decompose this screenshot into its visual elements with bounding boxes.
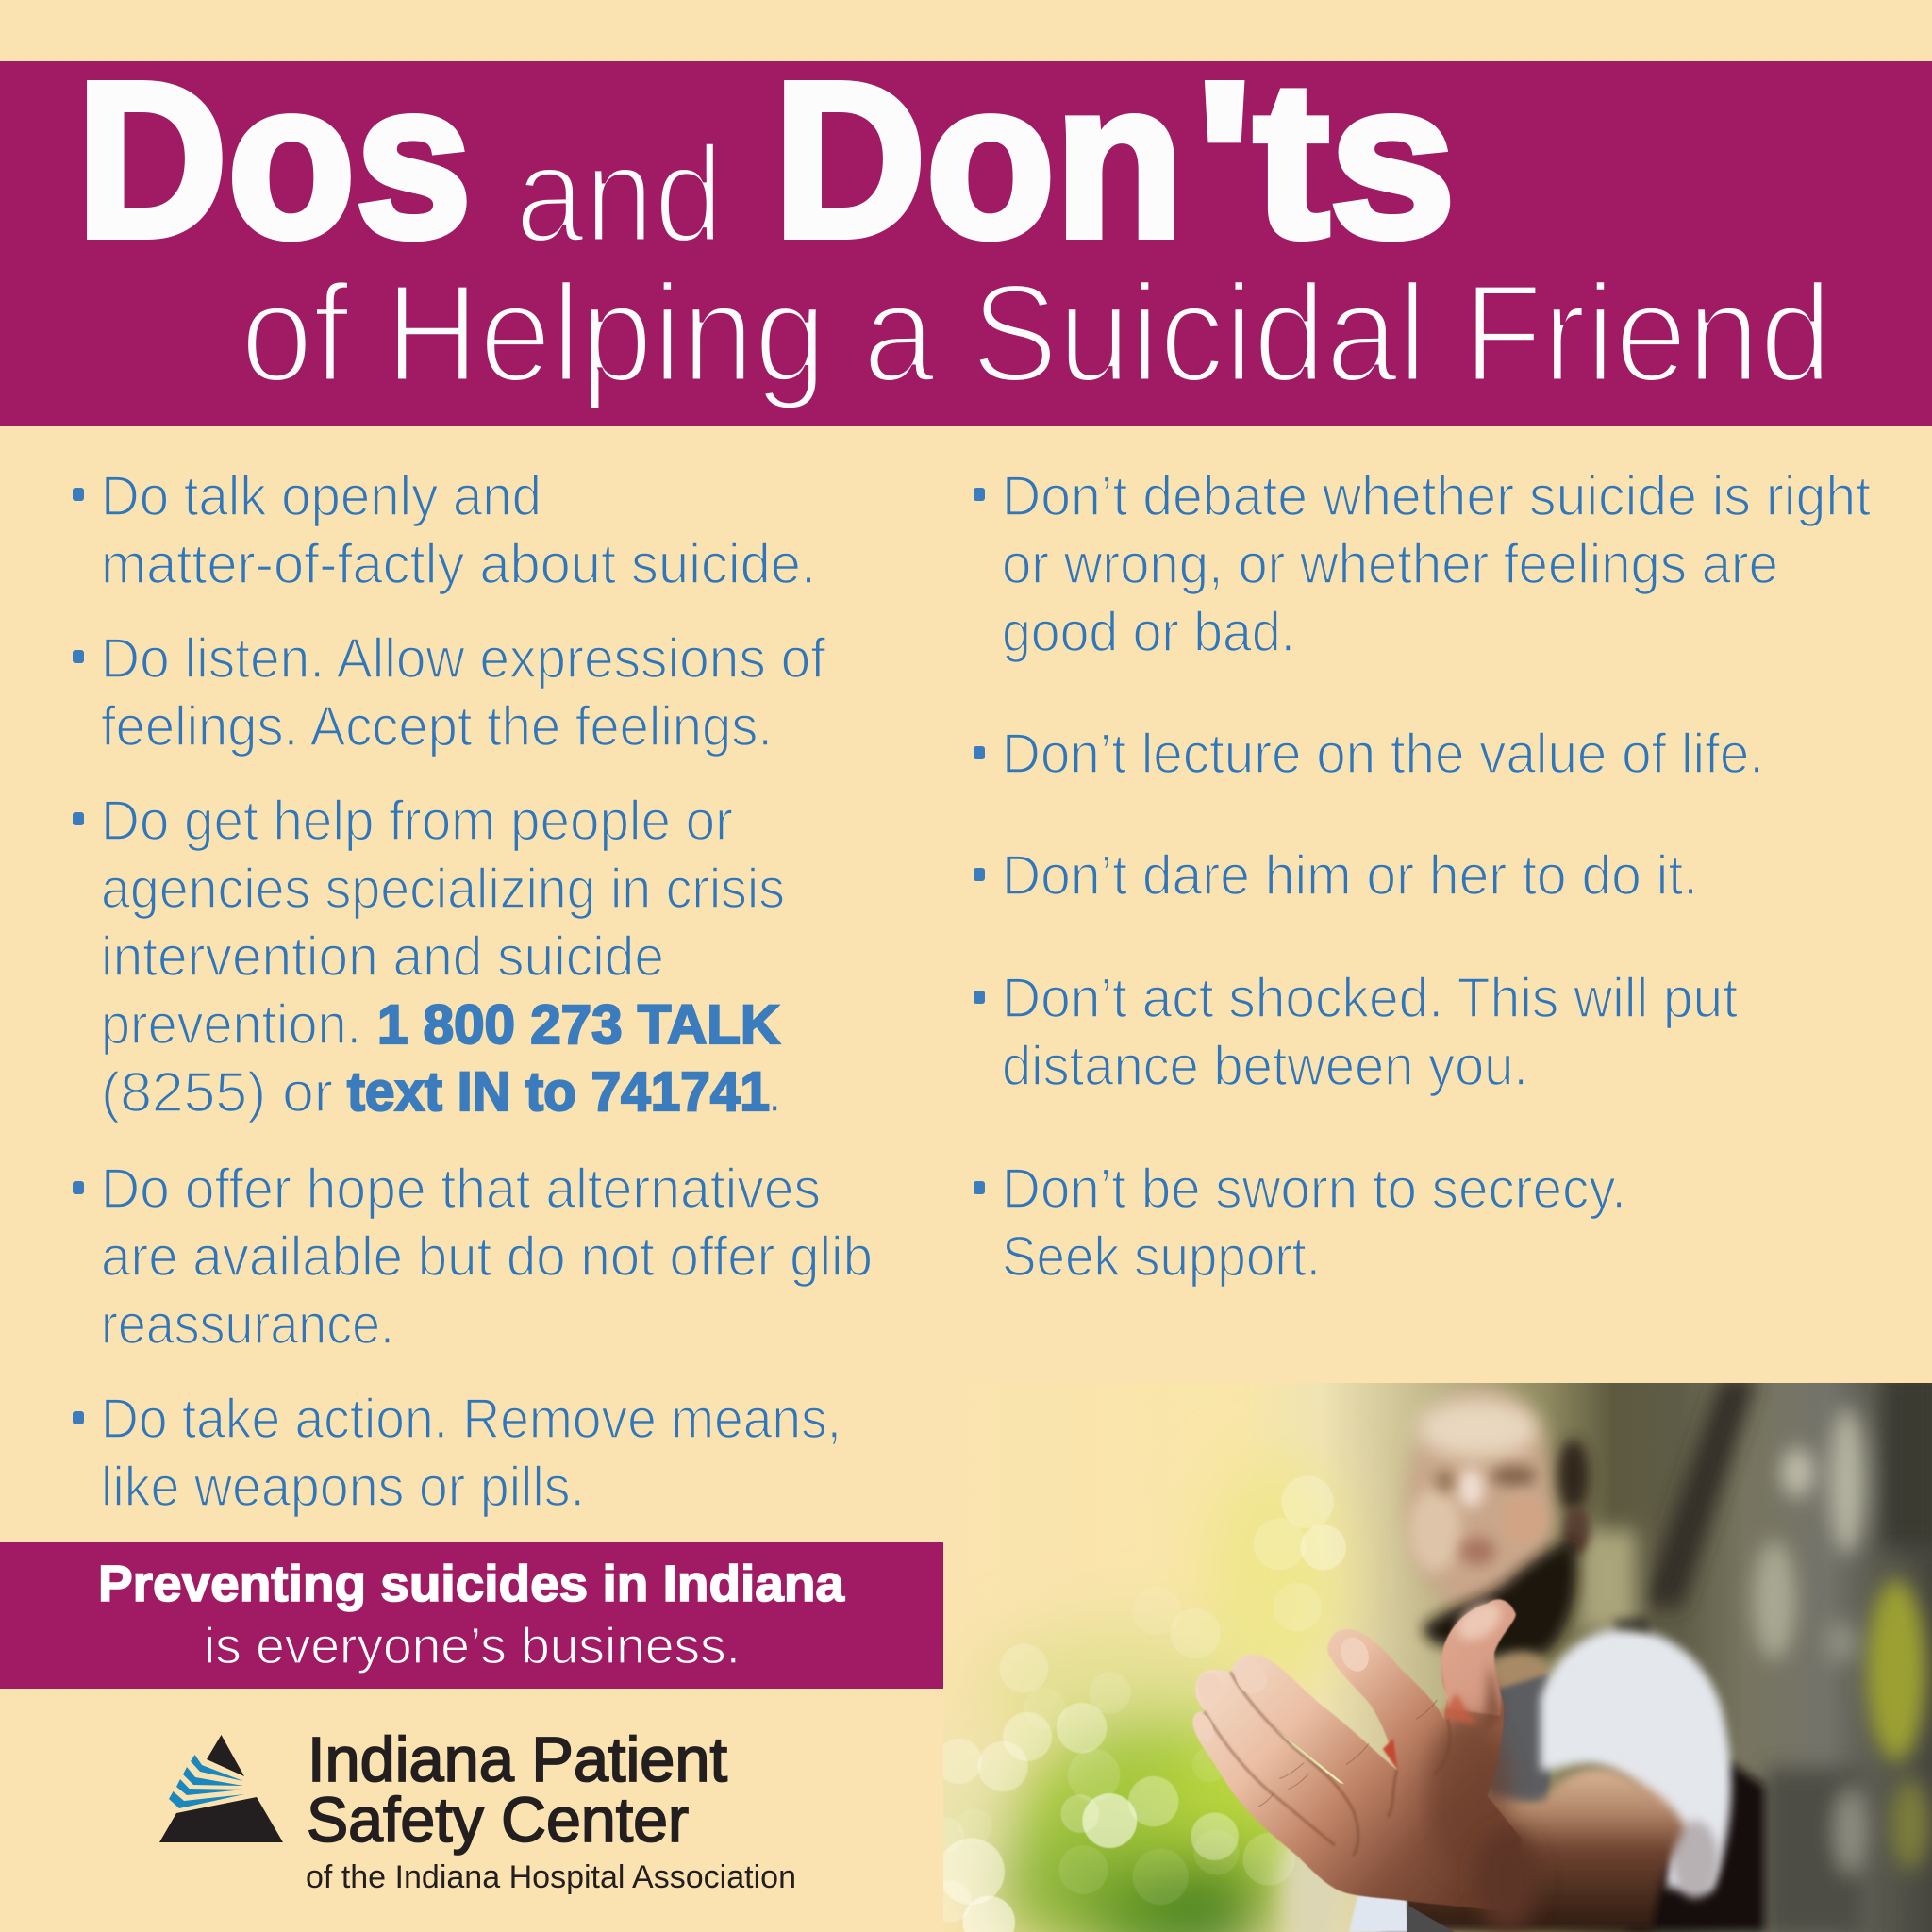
forearm: [1382, 1768, 1686, 1932]
logo: Indiana Patient Safety Center: [159, 1724, 796, 1895]
do item 2: Do listen. Allow expressions of: [101, 627, 826, 690]
icon: pyramid: [159, 1735, 283, 1842]
left column: dos: [73, 465, 873, 1518]
title: Dos: Dos: [76, 36, 472, 283]
don't item 2: Don’t lecture on the value of life.: [1002, 723, 1764, 785]
finger shading: [1205, 1672, 1450, 1856]
do item 3: prevention.: [101, 993, 361, 1056]
do item 1: Do talk openly and: [101, 465, 541, 527]
title: Don'ts: ts: [1254, 36, 1456, 283]
logo wordmark: Indiana Patient: [308, 1724, 727, 1795]
do item 3: text IN to 741741: [347, 1061, 770, 1123]
don't item 4: distance between you.: [1002, 1035, 1528, 1097]
sleeve collar shadow: [1613, 1618, 1653, 1632]
do item 3: Do get help from people or: [101, 790, 733, 852]
do item 2: [73, 627, 826, 758]
blend of wrist into arm: [1475, 1827, 1539, 1932]
do item 2: feelings. Accept the feelings.: [101, 695, 773, 758]
do item 3: .: [767, 1061, 782, 1124]
lower shirt: [1349, 1896, 1408, 1932]
fingernails: [1200, 1638, 1369, 1740]
don't item 5: Seek support.: [1002, 1225, 1321, 1288]
callout subline: is everyone’s business.: [204, 1618, 741, 1674]
do item 3: agencies specializing in crisis: [101, 858, 785, 920]
gap of light between fingers: [1274, 1728, 1344, 1784]
bokeh and hand: [929, 1475, 1539, 1932]
subtitle: of Helping a Suicidal Friend: [241, 256, 1832, 411]
do item 5: [73, 1388, 841, 1518]
do item 5: Do take action. Remove means,: [101, 1388, 841, 1450]
hair: [1557, 1439, 1590, 1512]
photo: man reaching out a hand: [915, 1373, 1932, 1932]
title: and: and: [515, 117, 724, 271]
palm shadow: [1426, 1716, 1510, 1876]
do item 4: Do offer hope that alternatives: [101, 1158, 821, 1220]
bokeh lights: [929, 1475, 1346, 1932]
do item 3: intervention and suicide: [101, 925, 664, 988]
hand: [1191, 1594, 1539, 1932]
logo wordmark: [306, 1724, 796, 1895]
thumb colouring: [1441, 1600, 1516, 1716]
logo wordmark: of the Indiana Hospital Association: [306, 1859, 796, 1895]
don't item 4: Don’t act shocked. This will put: [1002, 967, 1738, 1029]
don't item 5: [974, 1158, 1626, 1288]
callout band: [0, 1542, 943, 1689]
do item 4: [73, 1158, 873, 1356]
do item 1: [73, 465, 816, 595]
neck: [1495, 1645, 1549, 1689]
don't item 1: or wrong, or whether feelings are: [1002, 533, 1778, 595]
don't item 1: Don’t debate whether suicide is right: [1002, 465, 1871, 527]
do item 5: like weapons or pills.: [101, 1456, 585, 1518]
blurred man and wall: [1349, 1373, 1932, 1932]
do item 3: [73, 790, 785, 1124]
do item 3: 1 800 273 TALK: [377, 994, 780, 1056]
shirt: [1541, 1628, 1731, 1890]
don't item 1: [974, 465, 1871, 663]
do item 4: are available but do not offer glib: [101, 1225, 873, 1288]
title banner: [0, 36, 1932, 426]
don't item 4: [974, 967, 1738, 1097]
logo wordmark: Safety Center: [307, 1785, 689, 1856]
do item 3: (8255) or: [101, 1061, 333, 1124]
title: Don'ts: ': [1196, 36, 1253, 283]
right column: don'ts: [974, 465, 1871, 1288]
do item 4: reassurance.: [101, 1293, 394, 1356]
wall: [1580, 1373, 1932, 1932]
dark torso: [1626, 1761, 1764, 1932]
title: Don'ts: [774, 36, 1456, 283]
do item 1: matter-of-factly about suicide.: [101, 533, 816, 595]
callout headline: Preventing suicides in Indiana: [98, 1556, 845, 1612]
knuckle creases: [1258, 1700, 1437, 1807]
photo backdrop: [943, 1383, 1932, 1932]
don't item 5: Don’t be sworn to secrecy.: [1002, 1158, 1626, 1220]
greenery: [915, 1460, 1346, 1932]
don't item 3: Don’t dare him or her to do it.: [1002, 844, 1698, 907]
head: [1407, 1390, 1556, 1614]
web of fingers: [1442, 1693, 1475, 1724]
vest: [1488, 1674, 1550, 1807]
don't item 1: good or bad.: [1002, 601, 1295, 663]
beard: [1422, 1537, 1576, 1657]
title: Don'ts: Don: [774, 36, 1184, 283]
